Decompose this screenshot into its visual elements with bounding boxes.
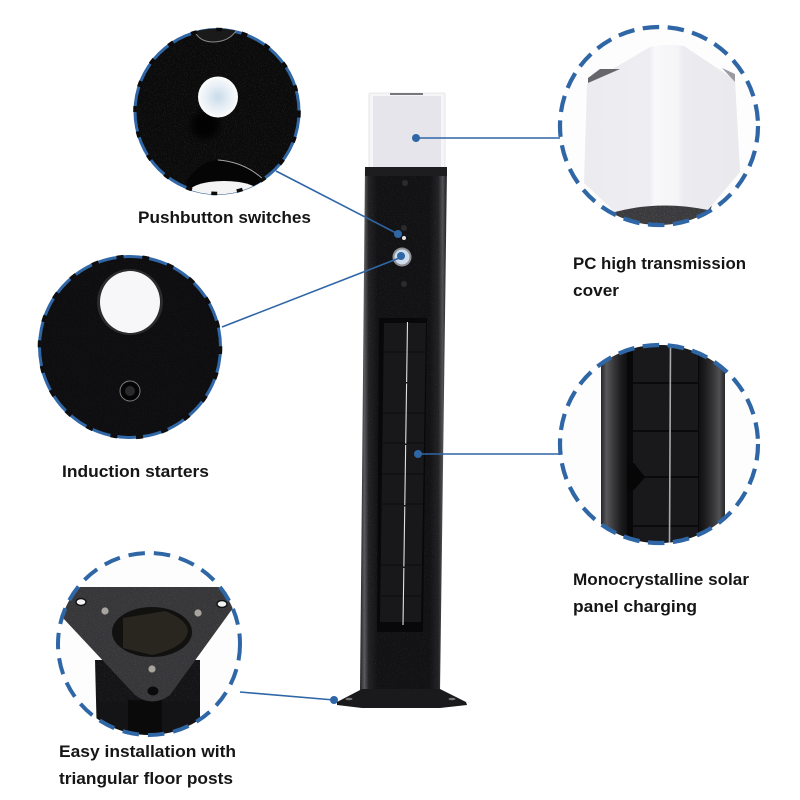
dark corners: [588, 69, 620, 83]
leader line: floor post: [240, 692, 334, 700]
circle detail: triangular floor post: [58, 553, 240, 740]
solar bollard light product: [337, 93, 467, 708]
label: easy installation: Easy installation with: [59, 742, 236, 761]
label: induction starters: Induction starters: [62, 462, 209, 481]
leader line: solar panel: [418, 453, 560, 455]
indicator LED: [402, 236, 406, 240]
top rim of post: [365, 167, 447, 176]
label: PC high transmission cover: [573, 254, 746, 300]
transparent top cover: [369, 93, 445, 168]
right post side: [699, 356, 725, 532]
label: easy installation: triangular floor posts: [59, 769, 233, 788]
sensor lens: [198, 76, 238, 118]
left post side: [601, 352, 627, 536]
label: monocrystalline solar panel charging: Monocrystalline solar: [573, 570, 749, 589]
circle detail: pushbutton switches: [134, 28, 300, 205]
label: monocrystalline solar panel charging: [573, 570, 749, 616]
silver conductor line: [403, 322, 408, 625]
label: easy installation: [59, 742, 236, 788]
white sensor dome: [97, 269, 163, 335]
top notch: [193, 28, 238, 42]
post below the plate: [95, 660, 200, 740]
post body: [360, 167, 447, 692]
solar panel: [377, 318, 427, 632]
circle detail: monocrystalline solar panel: [560, 340, 758, 550]
panel backing: [627, 340, 699, 550]
label: monocrystalline solar panel charging: panel charging: [573, 597, 697, 616]
silver line: [670, 344, 671, 545]
label: PC high transmission cover: PC high transmission: [573, 254, 746, 273]
small screw: [120, 381, 140, 401]
mounting holes: [76, 599, 86, 605]
bottom white opening: [186, 160, 261, 194]
small screw holes: [401, 180, 408, 287]
screws: [101, 607, 109, 615]
circle detail: induction starters: [38, 255, 222, 439]
central opening: [112, 607, 192, 657]
frosted cover body: [584, 45, 740, 212]
sensor button: [392, 248, 412, 266]
leader dots: [330, 134, 422, 704]
label: pushbutton switches: Pushbutton switches: [138, 208, 311, 227]
circle detail: PC high transmission cover: [560, 27, 758, 232]
notch: [633, 463, 644, 490]
mounting base plate: [337, 689, 467, 708]
leader line: induction starters: [222, 257, 402, 327]
leader line: pushbutton switches: [276, 171, 398, 234]
label: PC high transmission cover: cover: [573, 281, 619, 300]
panel cells: [633, 340, 698, 550]
leader line: PC cover: [416, 137, 560, 139]
black post section: [614, 205, 712, 225]
triangular plate: [63, 587, 233, 702]
